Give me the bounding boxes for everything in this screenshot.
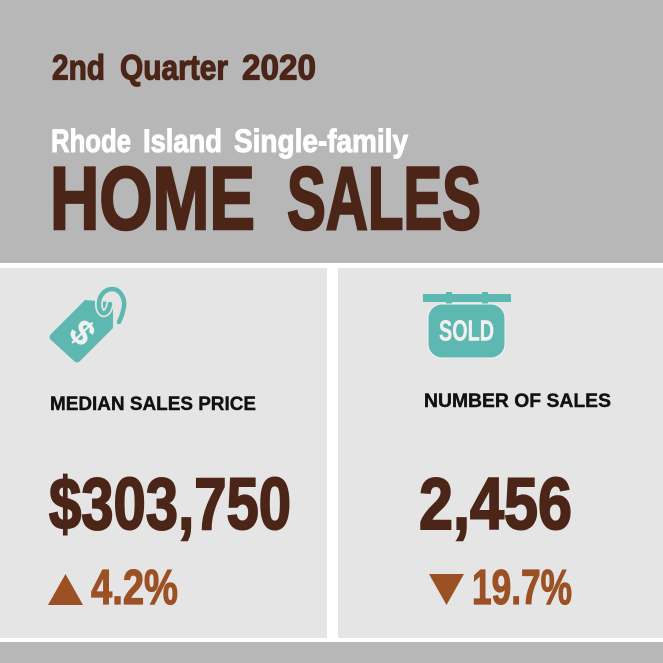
icon text: sold: SOLD (439, 316, 494, 348)
value: number of sales: 2,456 (419, 464, 572, 545)
change: median sales price: 4.2% (91, 561, 178, 615)
subtitle: Rhode (51, 123, 131, 159)
subtitle: Island (143, 123, 222, 159)
icon: sold sign (423, 292, 511, 358)
label: number of sales: NUMBER OF SALES (424, 390, 611, 412)
subtitle: Single-family (234, 123, 408, 159)
icon: down triangle (429, 574, 464, 605)
label: median sales price: MEDIAN SALES PRICE (50, 393, 256, 415)
icon: price tag (50, 289, 124, 362)
panel: median sales price (0, 268, 327, 638)
change: number of sales: 19.7% (472, 561, 572, 615)
date heading (52, 48, 316, 88)
bottom band (0, 642, 663, 663)
date heading: 2020 (242, 48, 316, 88)
icon: up triangle (48, 574, 83, 605)
value: median sales price: $303,750 (49, 464, 291, 545)
header band (0, 0, 663, 263)
icon glyph: dollar sign: $ (61, 312, 103, 354)
date heading: 2nd (52, 48, 105, 88)
main title: HOME (50, 148, 255, 248)
main title: SALES (287, 148, 481, 248)
panel: number of sales (338, 268, 663, 638)
subtitle (51, 123, 408, 159)
main title (50, 148, 481, 248)
date heading: Quarter (120, 48, 228, 88)
